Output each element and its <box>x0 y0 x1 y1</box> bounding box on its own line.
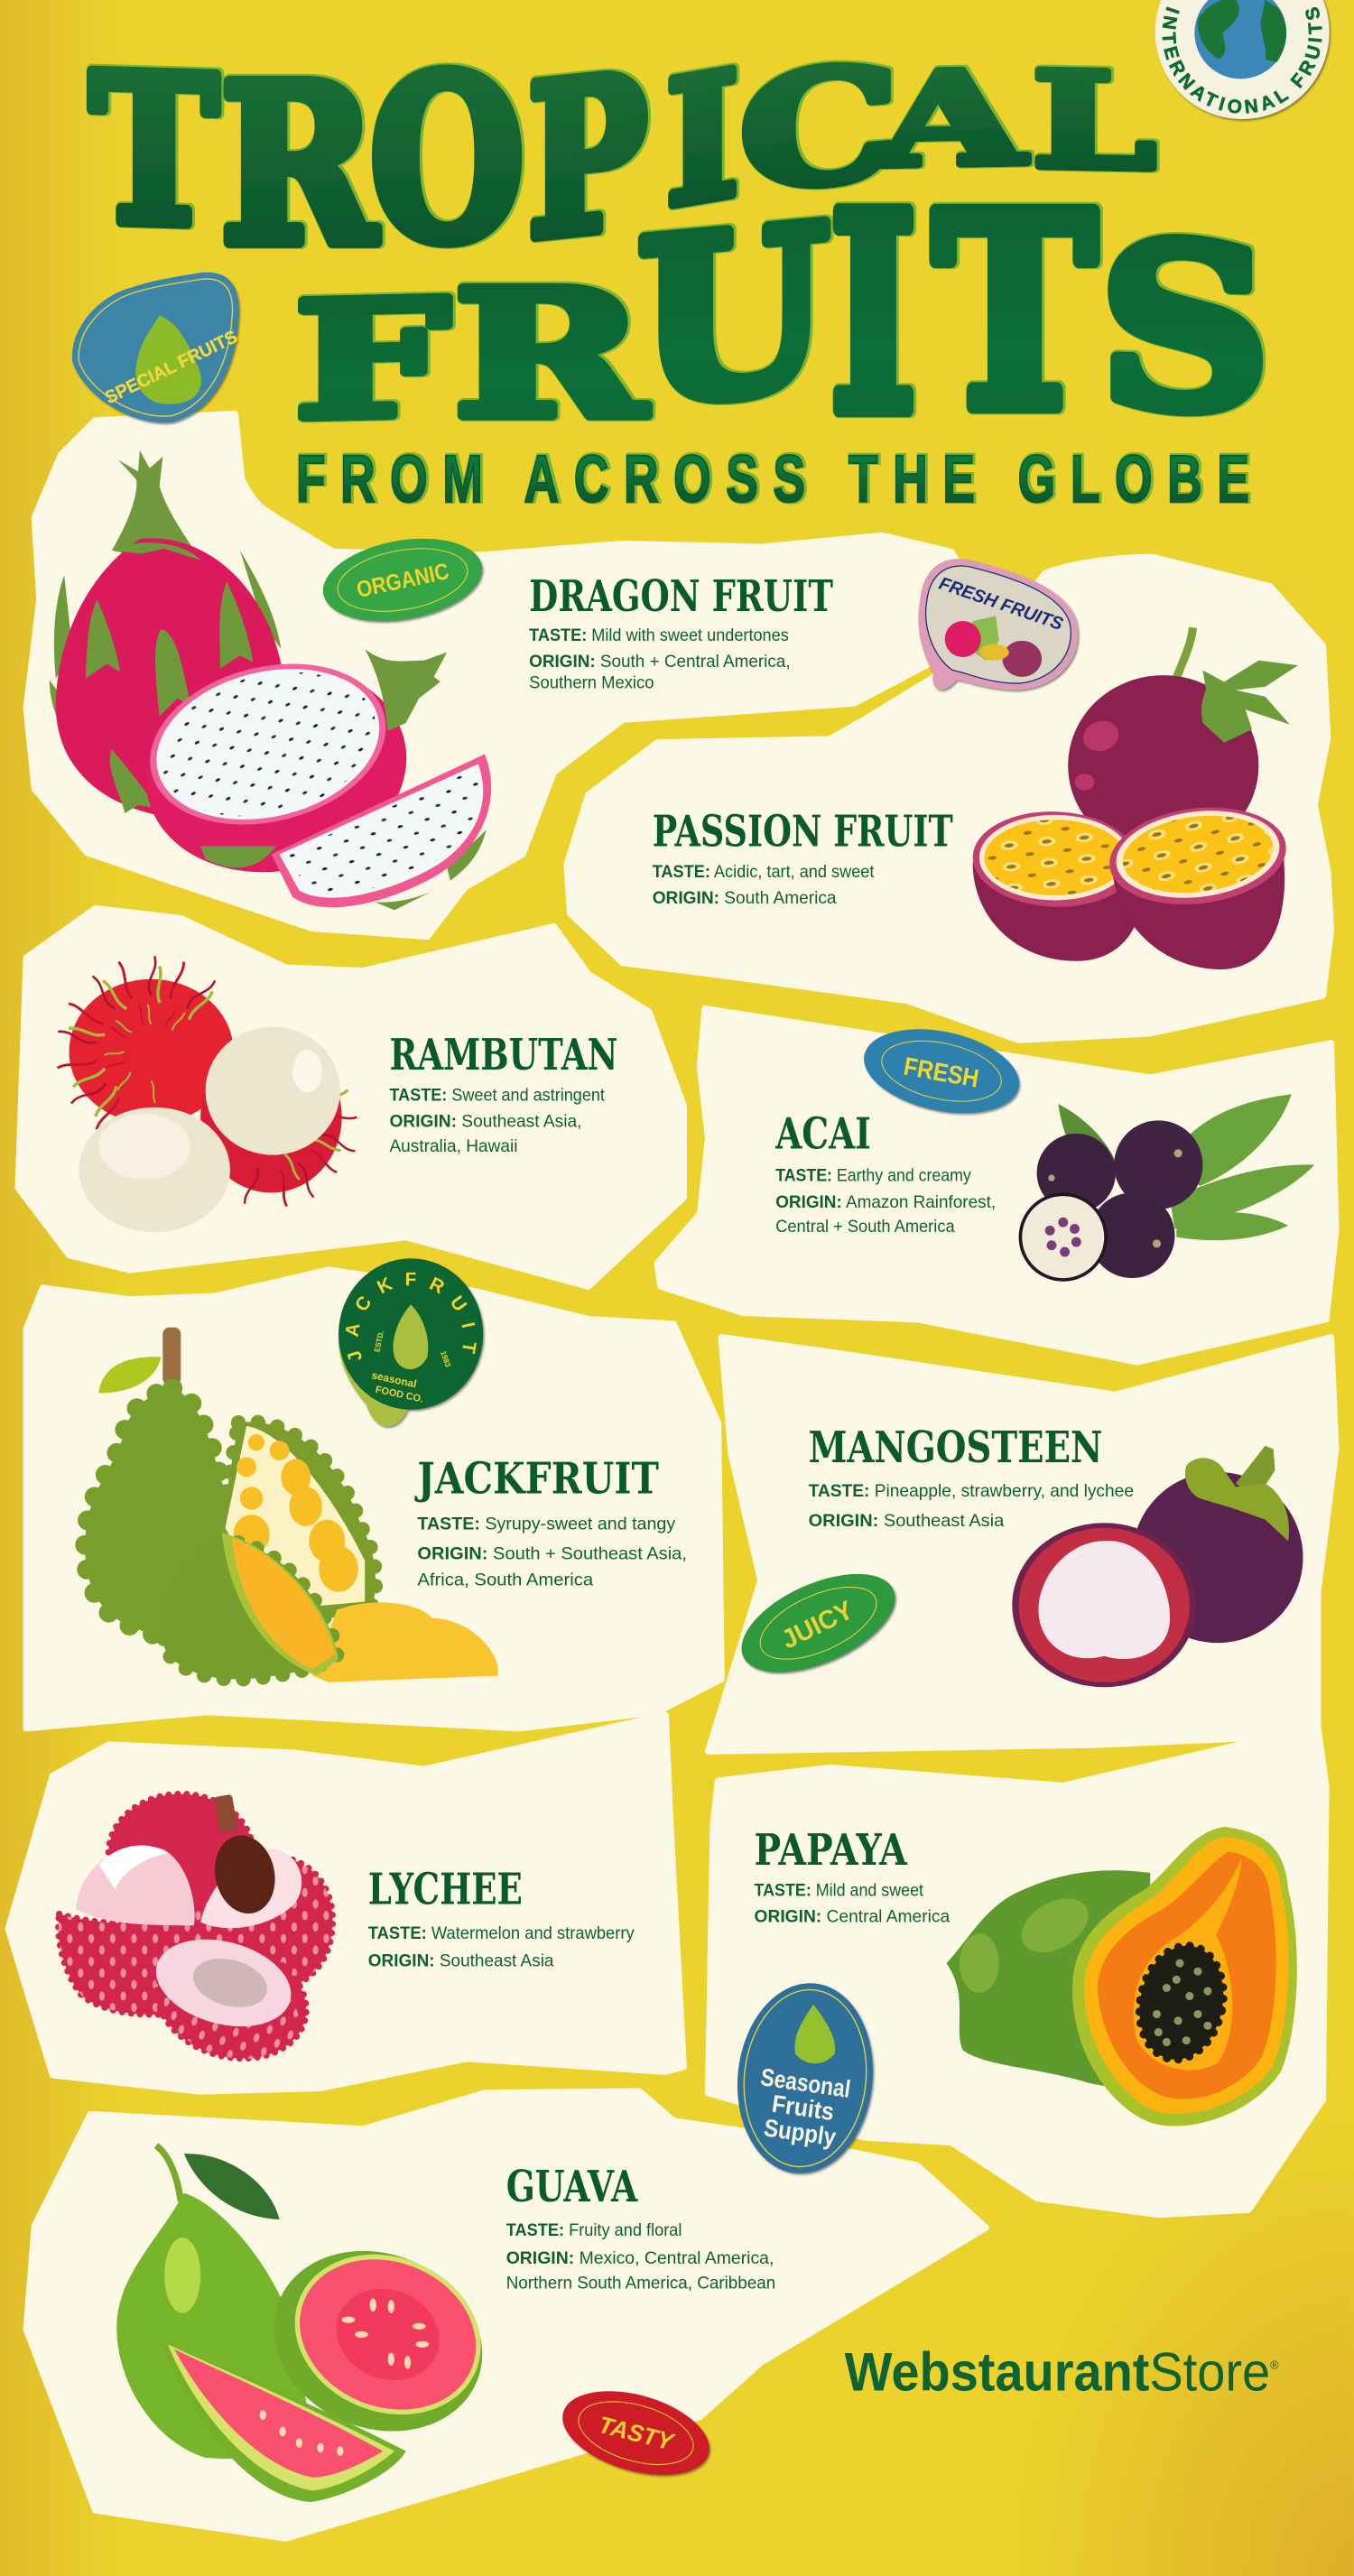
fruit: acai <box>1020 1094 1314 1280</box>
whole <box>1132 1472 1303 1643</box>
title: FRUITS <box>294 154 1270 473</box>
sticker: jackfruit: seasonal <box>370 1368 418 1391</box>
text: guava: TASTE: Fruity and floral <box>506 2221 682 2240</box>
text: guava: GUAVA <box>506 2163 638 2212</box>
stem <box>1173 627 1193 690</box>
fruit: lychee <box>59 1794 332 2074</box>
text: guava: Northern South America, Caribbean <box>506 2274 775 2293</box>
stem <box>162 1328 181 1385</box>
text: acai <box>774 1109 996 1237</box>
left half <box>973 863 1144 961</box>
sticker: fresh fruits: FRESH FRUITS <box>936 573 1066 635</box>
right half <box>1112 841 1284 969</box>
panel: lychee <box>8 1715 683 2091</box>
whole <box>947 1870 1150 2095</box>
flesh right <box>200 1849 301 1928</box>
text: guava: ORIGIN: Mexico, Central America, <box>506 2249 774 2268</box>
sticker: organic: ORGANIC <box>355 559 451 603</box>
pear <box>794 2005 835 2063</box>
title: TROPICAL: L <box>1032 43 1155 199</box>
leaf <box>1201 661 1298 743</box>
panel: rambutan <box>18 909 683 1286</box>
half <box>1012 1523 1196 1687</box>
text: rambutan: RAMBUTAN <box>389 1031 617 1080</box>
stem <box>1236 1446 1275 1498</box>
wedge <box>161 2343 406 2502</box>
text: papaya: TASTE: Mild and sweet <box>755 1881 924 1900</box>
text: passion fruit: TASTE: Acidic, tart, and sweet <box>653 863 875 882</box>
leaves <box>1058 1094 1314 1240</box>
text: lychee: TASTE: Watermelon and strawberry <box>368 1924 635 1943</box>
text: lychee: ORIGIN: Southeast Asia <box>368 1952 554 1971</box>
slice <box>375 829 487 910</box>
text: passion fruit: PASSION FRUIT <box>653 807 953 857</box>
text: papaya: PAPAYA <box>755 1826 908 1876</box>
text: acai: Central + South America <box>775 1218 955 1237</box>
panel: jackfruit <box>26 1270 721 1728</box>
sticker: special fruits <box>72 273 241 422</box>
text: jackfruit <box>414 1455 687 1589</box>
chunks <box>312 1602 498 1682</box>
text: papaya: ORIGIN: Central America <box>755 1908 951 1927</box>
cavity <box>1134 1857 1242 2071</box>
crown <box>112 450 200 561</box>
sticker: fresh: FRESH <box>902 1052 981 1093</box>
globe <box>1194 0 1286 79</box>
flesh <box>206 1027 340 1155</box>
sticker: fresh <box>857 1016 1027 1126</box>
seeds <box>1129 1938 1234 2068</box>
sticker: organic <box>317 527 488 633</box>
subtitle: FROM ACROSS THE GLOBE <box>296 440 1249 516</box>
text: lychee: LYCHEE <box>368 1866 523 1915</box>
text: lychee <box>368 1866 635 1971</box>
sticker: juicy: JUICY <box>777 1596 858 1655</box>
side scales <box>50 551 281 751</box>
bottom cup <box>144 1927 320 2074</box>
panel: passion fruit <box>567 558 1331 1040</box>
panel: guava <box>26 2091 986 2538</box>
fruit: mangosteen <box>1012 1446 1303 1687</box>
text: rambutan: Australia, Hawaii <box>389 1137 517 1156</box>
berries <box>1037 1134 1116 1212</box>
sticker: jackfruit: ESTD. <box>373 1330 385 1353</box>
sticker: juicy <box>728 1553 909 1692</box>
cap <box>1185 1458 1289 1541</box>
fruit: dragon fruit <box>50 450 491 910</box>
logo: ® <box>1270 2358 1279 2372</box>
title: FRUITS: S <box>1099 196 1270 462</box>
text: mangosteen: ORIGIN: Southeast Asia <box>809 1512 1005 1531</box>
text: papaya <box>755 1826 951 1927</box>
sticker: seasonal fruits supply: Fruits <box>770 2090 836 2126</box>
title: TROPICAL: I <box>665 33 739 246</box>
top ball <box>108 1794 253 1913</box>
sticker: jackfruit <box>338 1258 486 1430</box>
body <box>85 1388 247 1638</box>
crown front <box>112 542 200 561</box>
title: TROPICAL: O <box>370 27 524 292</box>
mini jackfruit <box>393 1304 428 1369</box>
red shell <box>200 1042 357 1207</box>
sticker: seasonal fruits supply: Seasonal <box>759 2062 852 2103</box>
text: rambutan: ORIGIN: Southeast Asia, <box>389 1113 581 1132</box>
text: rambutan: TASTE: Sweet and astringent <box>389 1087 606 1106</box>
pear <box>135 315 201 404</box>
title: TROPICAL: R <box>220 37 377 294</box>
text: dragon fruit: ORIGIN: South + Central America, <box>529 653 791 672</box>
title: FRUITS: T <box>933 156 1096 469</box>
title: FRUITS: F <box>294 264 450 455</box>
seed <box>208 1830 282 1919</box>
half <box>1072 1827 1297 2127</box>
cut berry <box>1020 1194 1106 1280</box>
logo: WebstaurantStore <box>845 2341 1270 2402</box>
scales on body <box>86 581 253 813</box>
text: jackfruit: TASTE: Syrupy-sweet and tangy <box>417 1515 676 1534</box>
text: dragon fruit: Southern Mexico <box>529 674 654 693</box>
leaf <box>98 1357 161 1393</box>
pear body <box>116 2193 312 2459</box>
lower flesh <box>79 1107 230 1232</box>
title: TROPICAL: T <box>89 30 218 273</box>
text: jackfruit: Africa, South America <box>417 1571 594 1589</box>
title: FRUITS: R <box>453 253 647 457</box>
sticker: fresh fruits <box>918 559 1078 690</box>
stem <box>156 2145 181 2201</box>
body <box>56 538 286 820</box>
whole fruit <box>1068 675 1258 856</box>
half <box>246 2220 510 2461</box>
panel: acai <box>657 1009 1336 1362</box>
fruit: passion fruit <box>971 627 1298 969</box>
mini fruit <box>945 616 1042 677</box>
front half <box>163 1541 337 1679</box>
sticker: international fruits: INTERNATIONAL FRUITS <box>1163 6 1322 114</box>
text: mangosteen: TASTE: Pineapple, strawberry, and lychee <box>809 1482 1134 1501</box>
title: TROPICAL <box>89 27 1155 294</box>
open half <box>224 1422 376 1618</box>
text: passion fruit: ORIGIN: South America <box>653 889 837 908</box>
sticker: seasonal fruits supply <box>728 1977 882 2180</box>
text: dragon fruit: TASTE: Mild with sweet undertones <box>529 626 789 645</box>
red ball <box>57 956 234 1130</box>
text: mangosteen <box>809 1423 1134 1531</box>
sticker: jackfruit: FOOD CO. <box>375 1385 424 1405</box>
text: dragon fruit: DRAGON FRUIT <box>529 572 833 622</box>
text: acai: ORIGIN: Amazon Rainforest, <box>775 1193 996 1212</box>
title <box>89 27 1270 473</box>
flesh left <box>76 1846 195 1925</box>
text: acai: ACAI <box>774 1109 871 1159</box>
text: jackfruit: JACKFRUIT <box>414 1455 659 1505</box>
fruit: rambutan <box>57 956 357 1232</box>
sticker: jackfruit: 1983 <box>439 1350 452 1368</box>
panel: dragon fruit <box>26 414 986 936</box>
text: dragon fruit <box>529 572 833 693</box>
text: jackfruit: ORIGIN: South + Southeast Asia, <box>417 1544 687 1563</box>
text: acai: TASTE: Earthy and creamy <box>775 1167 971 1186</box>
base <box>59 1857 332 2015</box>
text: passion fruit <box>653 807 953 908</box>
flesh <box>1038 1541 1170 1659</box>
fruit: guava <box>116 2145 510 2502</box>
title: FRUITS: U <box>637 177 829 456</box>
sticker: tasty: TASTY <box>596 2411 678 2456</box>
fruit: jackfruit <box>85 1328 498 1682</box>
text: rambutan <box>389 1031 617 1156</box>
sticker: special fruits: SPECIAL FRUITS <box>102 327 241 408</box>
panel: papaya <box>709 1727 1326 2215</box>
text: mangosteen: MANGOSTEEN <box>809 1423 1102 1473</box>
cut half <box>126 642 426 895</box>
sticker: tasty <box>552 2376 719 2490</box>
title: FRUITS: I <box>830 154 916 473</box>
title: TROPICAL: P <box>527 29 647 286</box>
sticker: seasonal fruits supply: Supply <box>762 2113 839 2151</box>
title: TROPICAL: A <box>876 43 1026 196</box>
curved text <box>1163 0 1322 113</box>
title: TROPICAL: C <box>739 31 899 226</box>
sticker: jackfruit: JACKFRUIT <box>345 1273 477 1360</box>
leaf <box>184 2154 280 2219</box>
fruit: papaya <box>947 1827 1297 2127</box>
text: guava <box>506 2163 775 2293</box>
panel: mangosteen <box>709 1338 1336 1751</box>
